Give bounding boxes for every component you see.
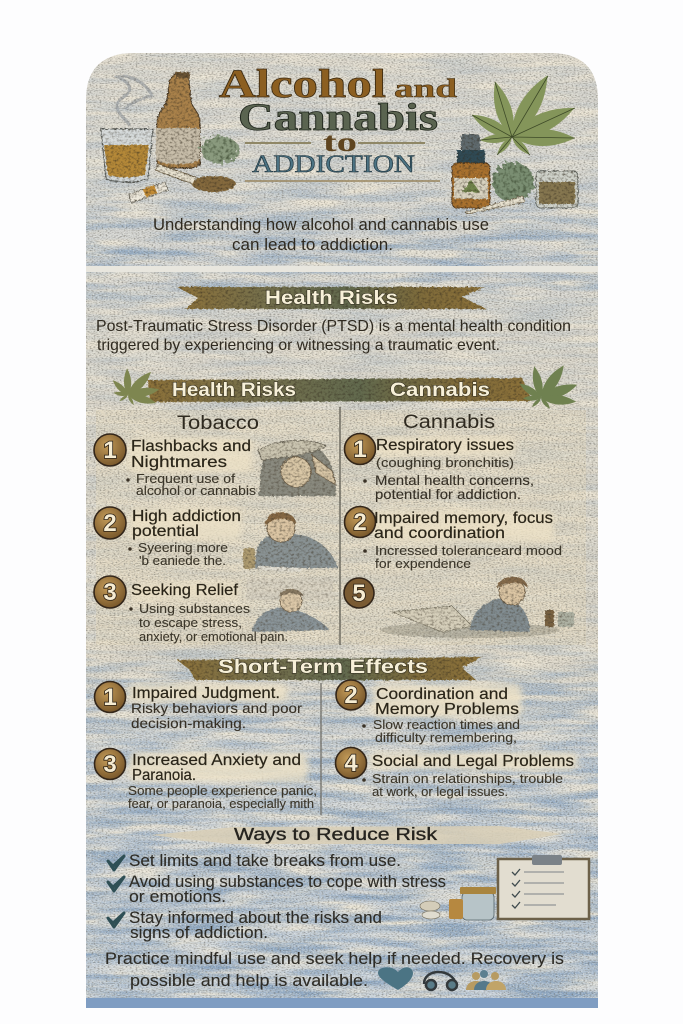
- item: short 4 social: Social and Legal Problems: [372, 753, 574, 770]
- item: short 1 impaired judgment: Risky behaviors and poor: [131, 700, 302, 716]
- banner: comparison header: Cannabis: [390, 380, 490, 401]
- item: short 2 coordination: [336, 680, 520, 745]
- item: right 5: [344, 578, 374, 608]
- item: left 1 flashbacks: [94, 434, 257, 498]
- item: right 1 respiratory: Respiratory issues: [376, 437, 514, 454]
- illustration: person with hand on head, top left: [258, 440, 336, 496]
- illustration: right herb bush: [492, 162, 534, 202]
- item: right 2 impaired memory: Incressed toleranceard mood: [375, 543, 562, 558]
- item: left 1 flashbacks: Frequent use of: [136, 471, 235, 486]
- title: Cannabis: [238, 96, 438, 139]
- item: short 1 impaired judgment: Impaired Judgment.: [132, 685, 280, 702]
- cream highlight patches: comparison: [128, 437, 554, 600]
- panel: textured poster: [86, 53, 598, 1008]
- item: left 2 high addiction: 2: [103, 510, 117, 537]
- item: left 3 seeking relief: Seeking Relief: [131, 582, 239, 599]
- item: left 2 high addiction: 'b eaniede the.: [139, 553, 226, 568]
- item: short 1 impaired judgment: [94, 682, 302, 731]
- item: right 2 impaired memory: [344, 506, 562, 571]
- item: left 1 flashbacks: 1: [103, 437, 117, 464]
- item: short 4 social: 4: [344, 750, 358, 777]
- item: short 2 coordination: Slow reaction times and: [373, 717, 520, 732]
- icon: check 2: [108, 877, 124, 891]
- closing statement: Practice mindful use and seek help if needed. Recovery is: [105, 950, 564, 968]
- title: to: [323, 127, 357, 157]
- item: left 1 flashbacks: alcohol or cannabis: [136, 483, 257, 498]
- illustration: dropper bottle, jar, joint: [452, 134, 578, 214]
- heading: ways to reduce risk: [150, 824, 562, 844]
- icon: headphones: [424, 972, 457, 990]
- item: right 5: 5: [352, 580, 366, 607]
- title: ADDICTION: [252, 151, 415, 178]
- icon: right leaf: [516, 359, 581, 412]
- item: left 3 seeking relief: 3: [103, 579, 117, 606]
- illustration: person at window, lower left: [247, 578, 333, 632]
- item: left 2 high addiction: potential: [132, 523, 199, 540]
- item: right 1 respiratory: (coughing bronchitis): [376, 455, 514, 470]
- item: short 3 anxiety: Paranoia.: [132, 767, 196, 784]
- title: and: [394, 74, 458, 103]
- intro text: [153, 215, 489, 254]
- item: right 1 respiratory: potential for addiction.: [375, 486, 521, 502]
- item: left 1 flashbacks: Flashbacks and: [131, 438, 251, 455]
- item: short 2 coordination: Memory Problems: [375, 701, 519, 718]
- item: right 2 impaired memory: for expendence: [375, 556, 471, 571]
- item: short 3 anxiety: 3: [103, 751, 117, 778]
- illustration: clipboard: [498, 855, 589, 919]
- heading: ways to reduce risk: Ways to Reduce Risk: [234, 824, 437, 844]
- item: right 1 respiratory: Mental health concerns,: [375, 472, 534, 488]
- item: short 3 anxiety: fear, or paranoia, especially mith: [128, 796, 314, 811]
- banner: short-term effects: [177, 657, 482, 680]
- column divider: [339, 407, 341, 645]
- checklist text: Avoid using substances to cope with stress: [129, 873, 446, 891]
- checklist text: Stay informed about the risks and: [129, 909, 382, 927]
- banner: comparison header: [148, 378, 532, 402]
- item: short 4 social: [336, 748, 574, 799]
- banner: comparison header: Health Risks: [172, 380, 296, 401]
- item: left 2 high addiction: [94, 507, 241, 568]
- item: left 3 seeking relief: [94, 576, 288, 644]
- item: short 3 anxiety: [94, 748, 317, 811]
- item: left 3 seeking relief: Using substances: [139, 601, 251, 616]
- item: left 1 flashbacks: Nightmares: [131, 454, 227, 471]
- item: left 2 high addiction: Syeering more: [138, 540, 228, 555]
- banner: health risks: [177, 287, 487, 309]
- item: short 3 anxiety: Increased Anxiety and: [132, 752, 301, 769]
- column heading: cannabis: Cannabis: [403, 412, 495, 433]
- item: right 2 impaired memory: Impaired memory, focus: [374, 510, 553, 527]
- item: short 4 social: Strain on relationships, trouble: [372, 771, 563, 786]
- illustration: left herb bush: [201, 136, 239, 164]
- cream highlight patches: [128, 684, 578, 782]
- icon: people group: [466, 970, 506, 990]
- checklist text: or emotions.: [129, 888, 226, 906]
- column divider: [320, 683, 322, 815]
- checklist text: [129, 852, 446, 942]
- PTSD paragraph: triggered by experiencing or witnessing a traumatic event.: [97, 337, 500, 354]
- item: left 3 seeking relief: anxiety, or emotional pain.: [139, 629, 288, 644]
- item: short 2 coordination: Coordination and: [376, 686, 508, 703]
- icon: check 3: [108, 913, 124, 927]
- item: short 1 impaired judgment: decision-making.: [131, 715, 246, 731]
- illustration: whiskey glass, bottle and smoke: [101, 72, 236, 203]
- column heading: tobacco: Tobacco: [177, 413, 259, 434]
- item: short 2 coordination: 2: [344, 682, 358, 709]
- illustration: reclining person, lower right: [380, 577, 574, 638]
- item: left 2 high addiction: High addiction: [132, 508, 241, 525]
- illustration: person with bottle, middle left: [243, 512, 338, 572]
- icon: left leaf: [106, 360, 165, 412]
- PTSD paragraph: [96, 318, 571, 354]
- intro text: can lead to addiction.: [232, 235, 393, 254]
- closing statement: [105, 950, 564, 990]
- item: short 1 impaired judgment: 1: [103, 684, 117, 711]
- banner: health risks: Health Risks: [265, 288, 398, 309]
- item: short 2 coordination: difficulty remembering,: [375, 730, 517, 745]
- checklist text: signs of addiction.: [130, 924, 268, 942]
- item: short 3 anxiety: Some people experience panic,: [128, 783, 317, 798]
- illustration: cannabis leaf: [469, 71, 578, 157]
- item: left 3 seeking relief: to escape stress,: [139, 615, 242, 630]
- item: short 4 social: at work, or legal issues.: [372, 784, 508, 799]
- item: right 2 impaired memory: 2: [353, 509, 367, 536]
- PTSD paragraph: Post-Traumatic Stress Disorder (PTSD) is a mental health condition: [96, 318, 571, 335]
- icon: heart: [378, 967, 413, 990]
- illustration: jars and pills: [420, 887, 496, 920]
- title: Alcohol: [219, 61, 386, 106]
- banner: short-term effects: Short-Term Effects: [218, 657, 428, 678]
- closing statement: possible and help is available.: [130, 972, 368, 990]
- item: right 1 respiratory: [344, 434, 534, 502]
- item: right 2 impaired memory: and coordination: [374, 525, 505, 542]
- checklist text: Set limits and take breaks from use.: [129, 852, 401, 870]
- intro text: Understanding how alcohol and cannabis use: [153, 215, 489, 234]
- item: right 1 respiratory: 1: [353, 436, 367, 463]
- icon: check 1: [108, 856, 124, 870]
- title: [219, 61, 458, 182]
